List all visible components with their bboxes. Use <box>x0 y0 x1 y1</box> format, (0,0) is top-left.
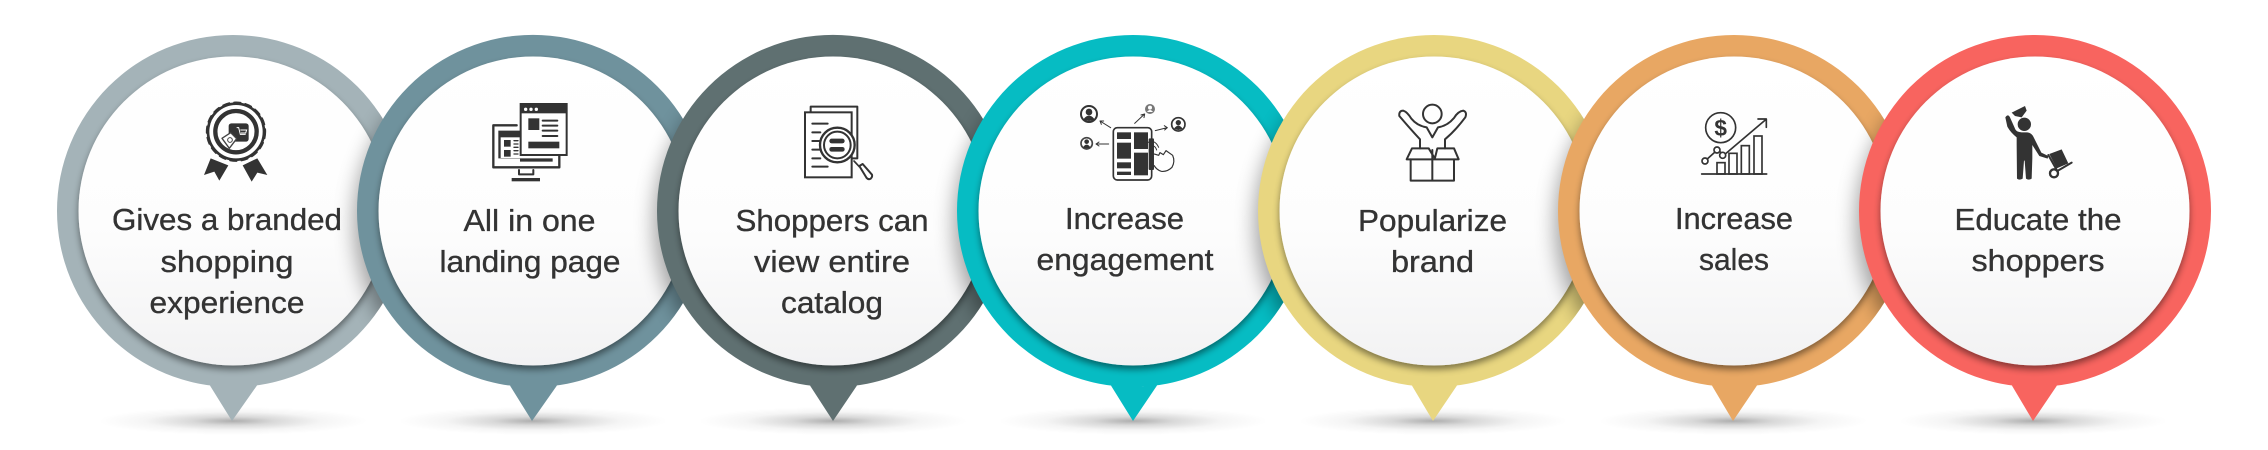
panel: popularize brand <box>1255 35 1610 421</box>
inner disc <box>1880 56 2190 366</box>
shadow on previous pin <box>1542 112 1584 322</box>
icon: graduate pushing cart <box>2005 106 2072 180</box>
text: educate the shoppers: shoppers <box>1972 243 2104 278</box>
icon: dollar coin and growth chart: $ <box>1714 115 1727 141</box>
shadow on previous pin <box>642 114 683 320</box>
text: educate the shoppers: Educate the <box>1954 202 2122 237</box>
shadow on previous pin <box>342 114 383 320</box>
text: popularize brand: brand <box>1391 244 1474 279</box>
shadow on previous pin <box>1242 114 1284 320</box>
pin ring coral <box>1859 35 2211 421</box>
ground shadows <box>98 407 2168 435</box>
inner disc <box>978 56 1288 366</box>
inner disc <box>1280 56 1588 366</box>
text: increase engagement: engagement <box>1036 242 1214 277</box>
text: popularize brand: Popularize <box>1358 203 1507 238</box>
shadow on previous pin <box>1844 113 1884 320</box>
panel: view entire catalog <box>654 35 1009 421</box>
text: view entire catalog <box>736 203 928 320</box>
pin ring slate blue <box>357 35 709 421</box>
text: educate the shoppers <box>1954 202 2122 278</box>
text: all in one landing page: landing page <box>440 244 620 279</box>
text: popularize brand <box>1358 203 1507 279</box>
text: view entire catalog: catalog <box>781 285 883 320</box>
panel: educate the shoppers <box>1856 35 2211 421</box>
panel: all in one landing page <box>354 35 709 421</box>
pin ring orange <box>1558 35 1910 421</box>
text: increase engagement <box>1036 201 1214 277</box>
inner disc <box>1580 56 1888 366</box>
text: branded shopping experience <box>112 202 342 320</box>
text: view entire catalog: view entire <box>754 244 910 279</box>
icon: rosette badge <box>204 102 267 182</box>
text: branded shopping experience: shopping <box>160 244 294 279</box>
panel: branded shopping experience <box>57 35 409 421</box>
icon: monitor with windows <box>493 104 567 181</box>
text: increase sales: sales <box>1699 242 1769 277</box>
text: increase sales <box>1675 201 1793 277</box>
text: increase engagement: Increase <box>1065 201 1184 236</box>
icon: dollar coin and growth chart <box>1702 113 1767 174</box>
panel: increase sales <box>1555 35 1910 421</box>
text: all in one landing page <box>440 203 620 279</box>
icon: person rising from box <box>1399 105 1466 181</box>
text: branded shopping experience: experience <box>150 285 304 320</box>
pin ring teal <box>957 35 1309 421</box>
text: branded shopping experience: Gives a branded <box>112 202 342 237</box>
text: all in one landing page: All in one <box>464 203 596 238</box>
inner disc <box>678 56 988 366</box>
text: view entire catalog: Shoppers can <box>736 203 928 238</box>
pin ring yellow <box>1258 35 1610 421</box>
icon: tablet, hand and users <box>1081 104 1185 180</box>
icon: documents with magnifier <box>805 107 872 179</box>
inner disc <box>78 56 388 366</box>
inner disc <box>378 56 688 366</box>
pin ring dark slate <box>657 35 1009 421</box>
panel: increase engagement <box>954 35 1309 421</box>
text: increase sales: Increase <box>1675 201 1793 236</box>
pin ring grey <box>57 35 409 421</box>
shadow on previous pin <box>942 116 983 318</box>
